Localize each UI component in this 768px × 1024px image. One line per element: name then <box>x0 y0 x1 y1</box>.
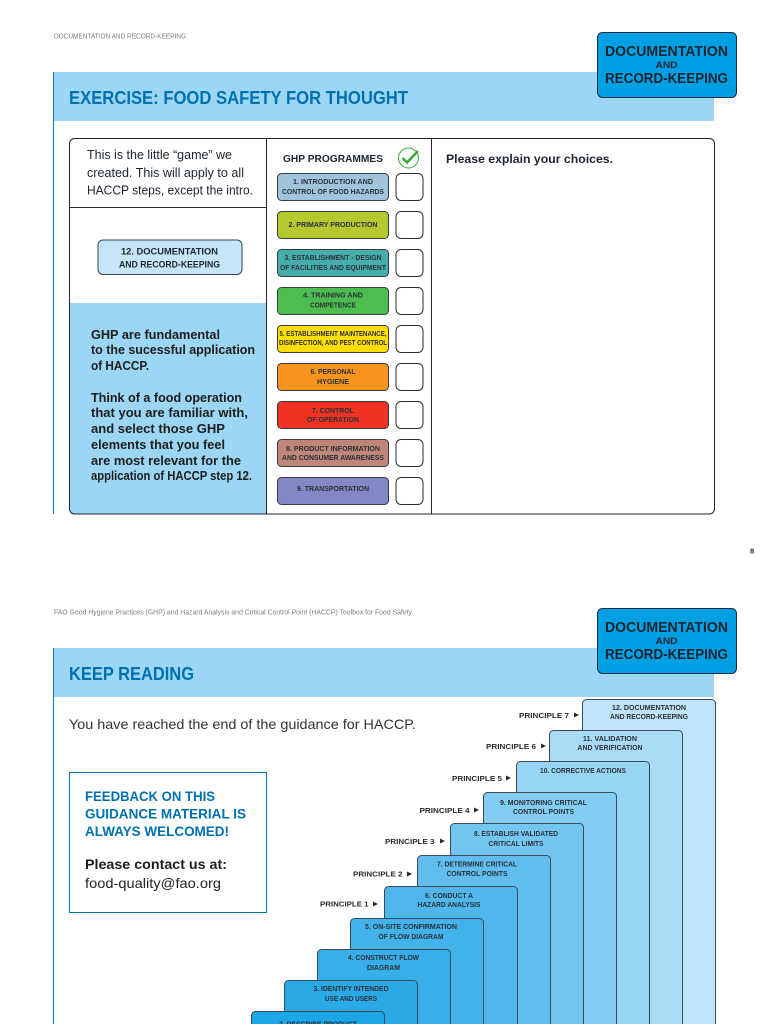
step 5 <box>350 918 484 1024</box>
step label: 12 documentation: AND RECORD-KEEPING <box>119 260 220 270</box>
badge: documentation and record-keeping (bottom): RECORD-KEEPING <box>605 647 728 663</box>
step 6: HAZARD ANALYSIS <box>418 902 481 909</box>
text block: GHP instructions: application of HACCP step 12. <box>91 469 252 483</box>
step 4: 4. CONSTRUCT FLOW <box>348 955 419 962</box>
heading band: exercise: EXERCISE: FOOD SAFETY FOR THOUGHT <box>69 88 408 108</box>
programme 1 <box>278 174 423 200</box>
text: end of guidance: You have reached the end of the guidance for HACCP. <box>69 716 416 732</box>
text: please explain: Please explain your choices. <box>446 152 613 166</box>
heading band: keep reading <box>53 648 714 1024</box>
principle labels: PRINCIPLE 6 <box>486 742 536 751</box>
programme 7: OF OPERATION <box>307 417 359 424</box>
text block: GHP instructions: to the sucessful application <box>91 343 255 357</box>
programme 3: OF FACILITIES AND EQUIPMENT <box>280 265 387 272</box>
badge: documentation and record-keeping (bottom): AND <box>656 636 678 647</box>
page header text: bottom: FAO Good Hygiene Practices (GHP) and Hazard Analysis and Critical Control Point (HACCP) Toolbox for Food Safety <box>54 610 412 616</box>
text block: GHP instructions: Think of a food operation <box>91 391 242 405</box>
badge: documentation and record-keeping (top): RECORD-KEEPING <box>605 71 728 87</box>
step 3 <box>284 980 418 1024</box>
step 9: CONTROL POINTS <box>513 809 574 816</box>
programme 3 <box>278 250 423 276</box>
staircase chart: HACCP steps <box>252 700 716 1024</box>
programme 5: 5. ESTABLISHMENT MAINTENANCE, <box>280 331 387 338</box>
programme 4: 4. TRAINING AND <box>303 292 363 300</box>
text block: GHP instructions: that you are familiar with, <box>91 406 248 420</box>
step 12: 12. DOCUMENTATION <box>612 705 686 712</box>
badge: documentation and record-keeping (top): AND <box>656 60 678 71</box>
programme 6: 6. PERSONAL <box>310 369 356 376</box>
step 8: 8. ESTABLISH VALIDATED <box>474 831 558 838</box>
panel: exercise table <box>70 138 714 514</box>
programme 1: CONTROL OF FOOD HAZARDS <box>282 189 384 196</box>
panel: blue instructions background <box>70 303 266 514</box>
principle labels <box>320 711 579 908</box>
page header text: top: DOCUMENTATION AND RECORD-KEEPING <box>54 34 186 40</box>
principle labels: PRINCIPLE 5 <box>452 774 502 783</box>
principle labels: PRINCIPLE 1 <box>320 900 368 908</box>
programme 9 <box>278 478 423 504</box>
step 7: 7. DETERMINE CRITICAL <box>437 862 518 868</box>
badge: documentation and record-keeping (bottom): DOCUMENTATION <box>605 620 728 636</box>
panel: feedback: food-quality@fao.org <box>85 875 221 891</box>
step 4 <box>318 950 450 1024</box>
principle labels: PRINCIPLE 4 <box>420 806 470 815</box>
programme 4: COMPETENCE <box>310 302 356 310</box>
programme 7: 7. CONTROL <box>312 408 355 415</box>
step label: 12 documentation: 12. DOCUMENTATION <box>121 246 218 256</box>
programme 6 <box>278 364 423 390</box>
programme 2: 2. PRIMARY PRODUCTION <box>288 222 378 229</box>
programme 8: AND CONSUMER AWARENESS <box>282 455 384 462</box>
principle labels: PRINCIPLE 7 <box>519 711 569 720</box>
step 4: DIAGRAM <box>367 965 400 972</box>
text block: game intro: This is the little “game” we <box>87 147 232 162</box>
step 10 <box>516 762 650 1024</box>
text block: GHP instructions: are most relevant for the <box>91 454 241 468</box>
step 9: 9. MONITORING CRITICAL <box>500 800 588 807</box>
programme 9: 9. TRANSPORTATION <box>297 486 369 493</box>
badge: documentation and record-keeping (top) <box>598 32 736 98</box>
panel: feedback <box>70 772 266 912</box>
programme 5 <box>278 326 423 352</box>
programme 1: 1. INTRODUCTION AND <box>293 179 373 186</box>
programme 6: HYGIENE <box>317 379 349 386</box>
step 3: 3. IDENTIFY INTENDED <box>314 986 388 993</box>
text block: GHP instructions <box>91 328 255 483</box>
heading band: exercise <box>53 72 714 514</box>
programme 2 <box>278 212 423 238</box>
step 8: CRITICAL LIMITS <box>488 841 544 848</box>
principle labels: PRINCIPLE 2 <box>353 870 402 878</box>
step 6: 6. CONDUCT A <box>425 893 473 900</box>
text block: GHP instructions: and select those GHP <box>91 422 225 436</box>
text block: GHP instructions: elements that you feel <box>91 438 225 452</box>
panel: feedback: Please contact us at: <box>85 856 227 872</box>
step 11: AND VERIFICATION <box>578 745 642 752</box>
badge: documentation and record-keeping (bottom) <box>598 608 736 674</box>
programme 8: 8. PRODUCT INFORMATION <box>286 446 380 453</box>
principle labels: PRINCIPLE 3 <box>385 837 434 846</box>
step 11 <box>550 730 682 1024</box>
step 10: 10. CORRECTIVE ACTIONS <box>540 768 626 775</box>
badge: documentation and record-keeping (top): DOCUMENTATION <box>605 44 728 60</box>
programme 5: DISINFECTION, AND PEST CONTROL <box>279 340 388 347</box>
step 3: USE AND USERS <box>325 996 377 1003</box>
programme 8 <box>278 440 423 466</box>
panel: feedback: FEEDBACK ON THIS <box>85 788 215 804</box>
text block: GHP instructions: of HACCP. <box>91 359 149 373</box>
step 5: 5. ON-SITE CONFIRMATION <box>365 924 457 931</box>
step 8 <box>450 824 584 1024</box>
step 7: CONTROL POINTS <box>446 871 508 878</box>
text block: game intro: HACCP steps, except the intro. <box>87 182 253 198</box>
step 7 <box>418 856 550 1024</box>
icon: green check mark <box>398 148 418 168</box>
panel: feedback: GUIDANCE MATERIAL IS <box>85 806 246 822</box>
step label: 12 documentation <box>98 240 242 274</box>
step 12: AND RECORD-KEEPING <box>610 714 689 721</box>
step 11: 11. VALIDATION <box>583 736 637 743</box>
step 12 <box>582 700 716 1024</box>
programme 3: 3. ESTABLISHMENT - DESIGN <box>284 255 382 262</box>
step 9 <box>484 792 616 1024</box>
table outline <box>70 138 714 514</box>
programme 7 <box>278 402 423 428</box>
heading: GHP programmes: GHP PROGRAMMES <box>283 153 383 165</box>
panel: feedback: ALWAYS WELCOMED! <box>85 823 229 839</box>
text block: game intro <box>87 147 253 198</box>
programme 4 <box>278 288 423 314</box>
step 6 <box>384 886 518 1024</box>
step 2 <box>252 1012 384 1024</box>
heading band: keep reading: KEEP READING <box>69 664 194 684</box>
text block: GHP instructions: GHP are fundamental <box>91 328 220 342</box>
step 5: OF FLOW DIAGRAM <box>378 934 444 941</box>
page number: 8 <box>750 546 754 556</box>
text block: game intro: created. This will apply to all <box>87 165 244 180</box>
